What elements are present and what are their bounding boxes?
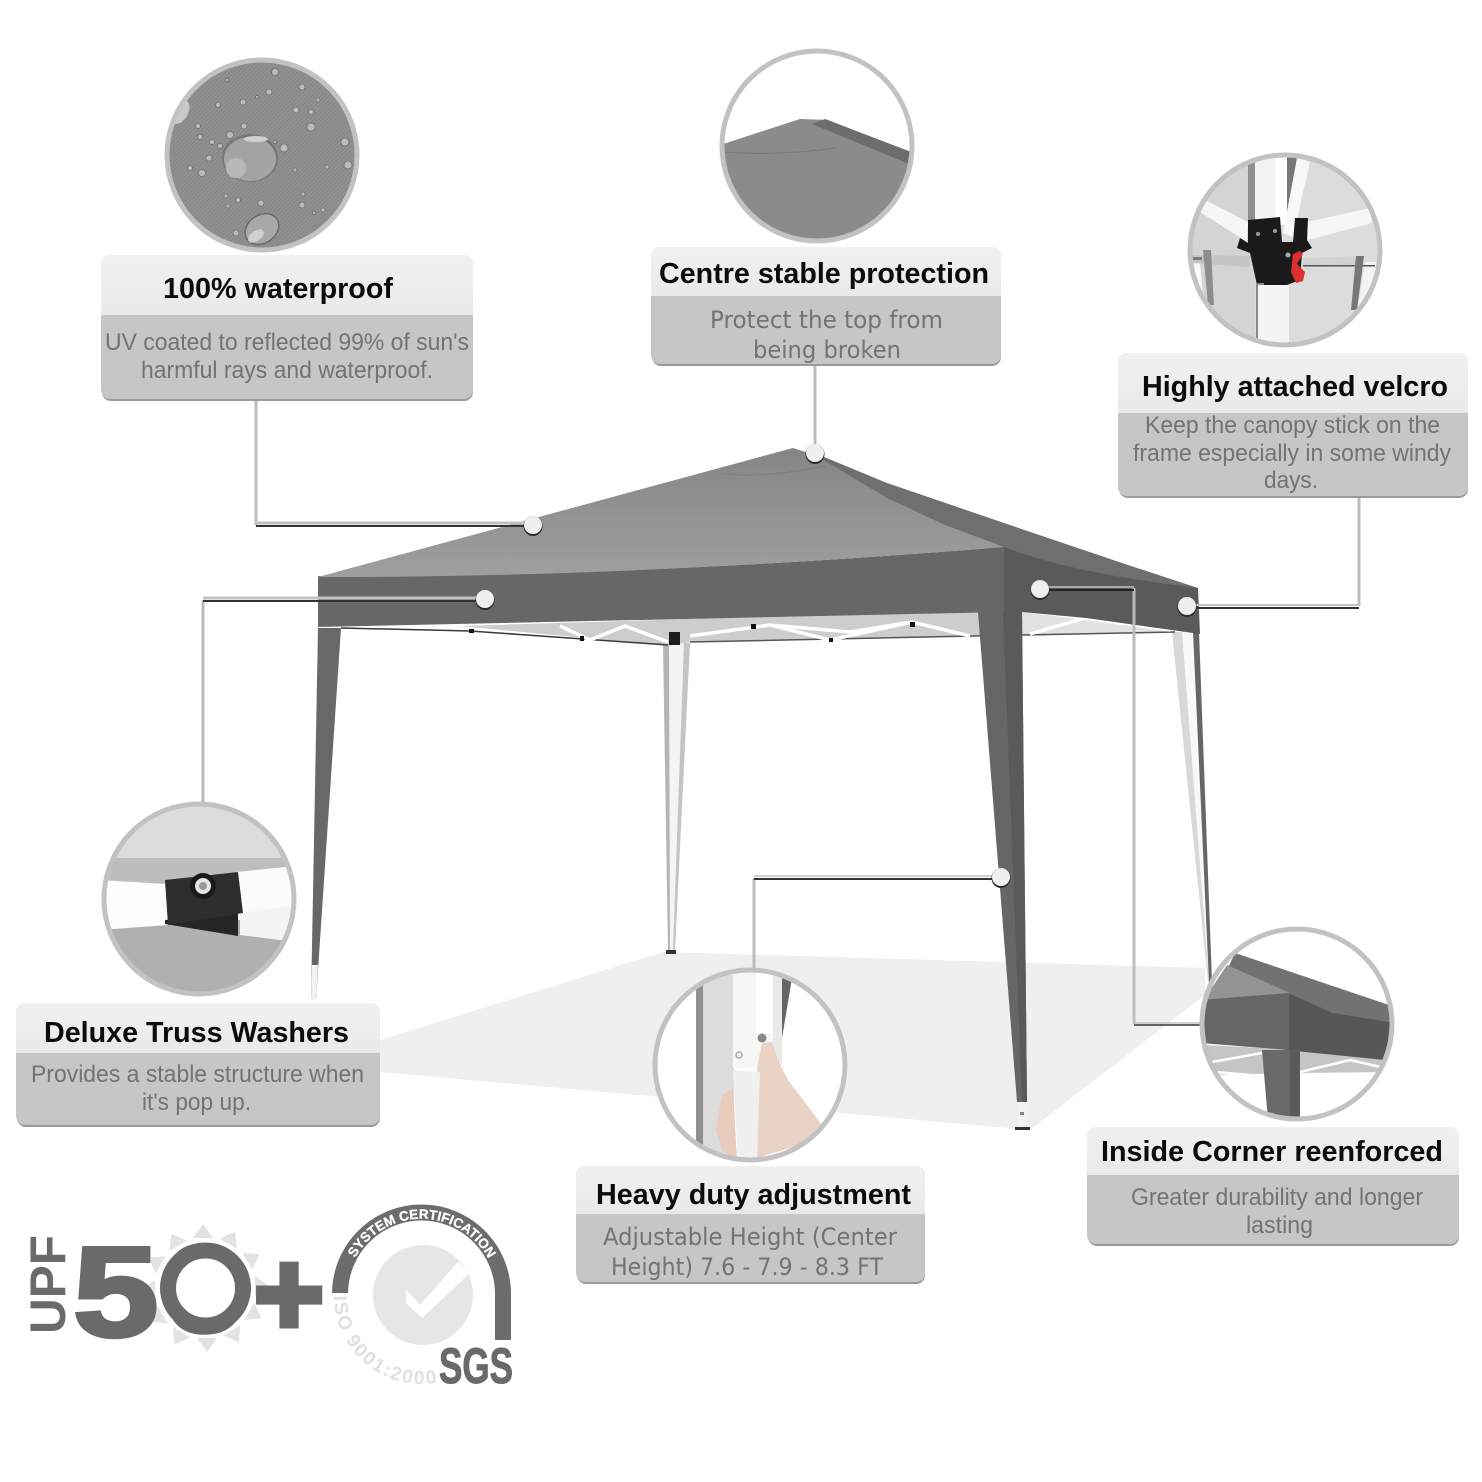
canopy roof: [318, 448, 1004, 577]
ground shadow: [380, 952, 1205, 1130]
description: days.: [1264, 467, 1318, 494]
circle: truss washer detail: [100, 800, 300, 1000]
description: [31, 1061, 364, 1116]
tent leg: back centre: [663, 643, 690, 954]
connector: velcro: [1178, 497, 1359, 617]
panel: inside corner reenforced: [1087, 1127, 1459, 1246]
heading: Inside Corner reenforced: [1101, 1136, 1443, 1168]
circle: water droplets on fabric: [160, 55, 365, 260]
50+ value: [73, 1218, 324, 1363]
circle: velcro frame detail: [1185, 150, 1390, 355]
connector: truss washers: [203, 590, 494, 803]
panel: deluxe truss washers: [16, 1003, 380, 1127]
SGS label: SGS: [439, 1338, 513, 1394]
heading: 100% waterproof: [163, 273, 393, 305]
icon: check mark circle: [373, 1245, 473, 1345]
tent leg: right: [1172, 632, 1212, 982]
description: Provides a stable structure when: [31, 1061, 364, 1088]
icon: sun rays: [141, 1224, 269, 1352]
description: lasting: [1246, 1212, 1313, 1239]
description: [1131, 1184, 1423, 1239]
description: [710, 306, 943, 364]
description: Keep the canopy stick on the: [1145, 412, 1440, 439]
connector: waterproof: [256, 400, 542, 536]
description: frame especially in some windy: [1133, 440, 1451, 467]
certification arc: [340, 1213, 503, 1340]
description: Adjustable Height (Center: [603, 1223, 897, 1251]
connector: inside corner: [1030, 580, 1200, 1025]
description: UV coated to reflected 99% of sun's: [105, 329, 469, 356]
canopy underside and truss: [341, 610, 1175, 646]
canopy tent: [311, 448, 1212, 1130]
50+ value: 0: [160, 1218, 250, 1361]
panel: waterproof: [101, 255, 473, 401]
UPF label: UPF: [20, 1235, 76, 1334]
50+ value: 5: [73, 1220, 158, 1363]
panel: heavy duty adjustment: [576, 1166, 925, 1284]
badge: SGS system certification: [332, 1204, 513, 1394]
panel: centre stable protection: [651, 247, 1001, 366]
canopy valance front: [318, 547, 1004, 627]
connector: centre: [806, 365, 824, 464]
description: Protect the top from: [710, 306, 943, 334]
heading: Centre stable protection: [659, 258, 989, 290]
arc label: SYSTEM CERTIFICATION: [348, 1209, 496, 1258]
description: harmful rays and waterproof.: [141, 357, 433, 384]
tent leg: front corner: [978, 612, 1030, 1130]
canopy valance right: [1000, 547, 1200, 634]
description: Greater durability and longer: [1131, 1184, 1423, 1211]
badge: UPF 50+: [20, 1218, 324, 1363]
description: [1133, 412, 1451, 494]
tent leg: front left: [311, 628, 341, 1000]
circle: inside corner detail: [1195, 925, 1400, 1125]
connector: height adjustment: [754, 868, 1010, 970]
heading: Heavy duty adjustment: [596, 1179, 911, 1211]
heading: Highly attached velcro: [1142, 371, 1448, 403]
description: it's pop up.: [142, 1089, 251, 1116]
description: [105, 329, 469, 384]
circle: height adjustment detail: [650, 965, 850, 1165]
50+ value: +: [254, 1227, 324, 1361]
ISO label: ISO 9001:2000: [334, 1296, 436, 1384]
canopy ridge strip: [812, 452, 1198, 596]
heading: Deluxe Truss Washers: [44, 1017, 349, 1049]
panel: highly attached velcro: [1118, 353, 1468, 498]
description: [603, 1223, 897, 1281]
description: being broken: [753, 336, 901, 364]
description: Height) 7.6 - 7.9 - 8.3 FT: [611, 1253, 883, 1281]
circle: canopy top detail: [715, 45, 920, 250]
